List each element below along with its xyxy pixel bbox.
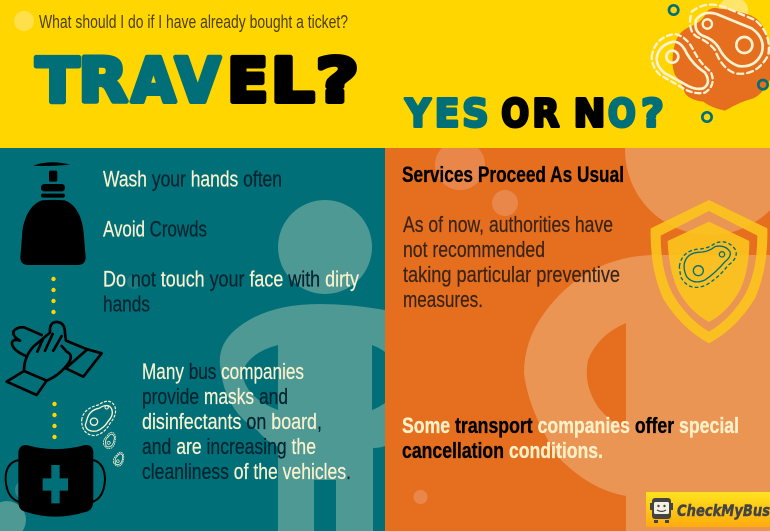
text: bus companies provide masks: Many bus companies [142, 359, 304, 384]
title: travel: T [36, 46, 79, 116]
icon: floating germs [82, 401, 127, 468]
panel: right orange services info [385, 65, 770, 531]
logo: CheckMyBus [646, 492, 770, 527]
text: avoid crowds: Avoid Crowds [103, 216, 207, 242]
text: special cancellation conditions: cancellation conditions. [402, 438, 603, 463]
text: authorities statement: not recommended [403, 237, 545, 262]
icon: face mask with cross [6, 445, 105, 517]
text: question: What should I do if I have already bought a ticket? [39, 12, 348, 32]
text: authorities statement [403, 212, 620, 312]
title: yes or no [404, 92, 664, 136]
title: travel [36, 46, 359, 116]
icon: bus [650, 498, 673, 523]
text: wash your hands: Wash your hands often [103, 166, 282, 192]
figure: person silhouette [0, 200, 385, 531]
text: bus companies provide masks: disinfectants on board, [142, 409, 322, 434]
title: yes or no: O [608, 92, 636, 136]
panel: yellow header [0, 0, 770, 148]
figure: large person silhouette [414, 65, 770, 531]
icon: small rings [669, 5, 768, 122]
title: travel: R [78, 46, 128, 116]
text: special cancellation conditions: Some transport companies offer special [402, 413, 739, 438]
title: travel: E [227, 46, 268, 116]
text: do not touch your face: hands [103, 292, 150, 316]
icon: pale circle [14, 11, 34, 31]
text: special cancellation conditions [402, 413, 739, 463]
icon: shield with germ [651, 200, 767, 343]
text: bus companies provide masks: cleanliness of the vehicles. [142, 459, 351, 484]
illustration: orange blob with germs [652, 0, 770, 122]
text: authorities statement: As of now, authorities have [403, 212, 613, 237]
text: bus companies provide masks [142, 359, 351, 484]
text: do not touch your face: Do not touch your face with dirty [103, 266, 359, 292]
title: travel: ? [316, 46, 359, 116]
icon: soap dispenser [20, 162, 86, 265]
title: yes or no: O [501, 92, 529, 136]
title: yes or no: E [435, 92, 459, 136]
decoration: dotted line from hands to mask [52, 402, 57, 439]
title: yes or no: ? [641, 92, 664, 136]
title: yes or no: R [532, 92, 559, 136]
title: travel: L [271, 46, 314, 116]
decoration: dotted line from soap to hands [51, 277, 56, 314]
text: bus companies provide masks: and are increasing the [142, 434, 316, 459]
icon: germ on shield [679, 242, 736, 287]
title: yes or no: N [574, 92, 606, 136]
text: bus companies provide masks: provide masks and [142, 384, 288, 409]
icon: washing hands [7, 322, 102, 395]
heading: services proceed as usual: Services Proceed As Usual [402, 162, 624, 187]
text: do not touch your face [103, 266, 359, 316]
title: yes or no: Y [404, 92, 432, 136]
title: travel: A [132, 46, 176, 116]
title: yes or no: S [462, 92, 489, 136]
title: travel: V [175, 46, 220, 116]
text: authorities statement: measures. [403, 287, 483, 312]
text: authorities statement: taking particular preventive [403, 262, 620, 287]
panel: left teal health advice [0, 148, 385, 531]
